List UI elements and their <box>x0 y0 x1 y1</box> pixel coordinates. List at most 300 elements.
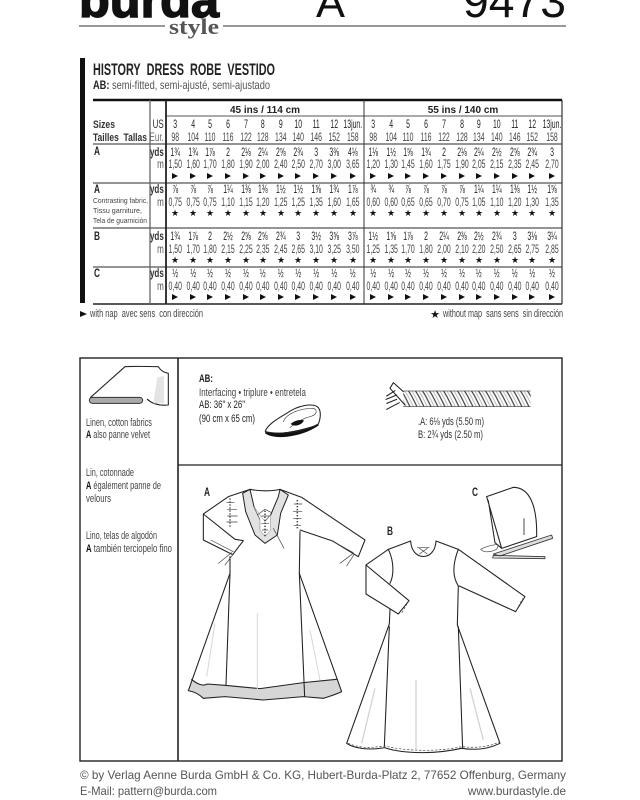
table values: 122 <box>240 131 252 145</box>
table values: 2,65 <box>291 243 305 257</box>
table values: 0,65 <box>419 196 433 210</box>
unit labels: yds <box>150 147 164 159</box>
table values: 134 <box>275 131 287 145</box>
table values: 0,40 <box>545 280 559 294</box>
table values: 13jun. <box>343 118 362 132</box>
table values: 116 <box>421 131 431 145</box>
table values: 8 <box>460 118 464 132</box>
stars: row A contrasting: ★ <box>206 209 214 219</box>
table values: ½ <box>225 267 231 281</box>
stars: row B: ★ <box>206 256 214 266</box>
stars: row B: ★ <box>277 256 285 266</box>
icon: twisted cord <box>386 383 531 409</box>
table values: 2,65 <box>508 243 522 257</box>
table values: 98 <box>369 131 377 145</box>
row labels <box>93 119 148 280</box>
table values: 1⅜ <box>241 183 251 197</box>
table values: 0,40 <box>455 280 469 294</box>
table values: 4⅛ <box>348 146 358 160</box>
table values: ½ <box>190 267 196 281</box>
table values: 11 <box>511 118 518 132</box>
table values: 0,40 <box>490 280 504 294</box>
table values: 1⅞ <box>348 183 358 197</box>
table values: 2,00 <box>256 158 270 172</box>
table values: 1,65 <box>346 196 360 210</box>
table values: 110 <box>403 131 413 145</box>
table values: 0,40 <box>419 280 433 294</box>
table values: 0,40 <box>221 280 235 294</box>
table values: 1⅛ <box>368 146 378 160</box>
table values: 158 <box>347 131 359 145</box>
table values: 3 <box>173 118 177 132</box>
table values: 3,65 <box>346 158 360 172</box>
unit labels: m <box>157 244 164 256</box>
nap arrows: row C <box>172 294 555 300</box>
text: interfacing requirements <box>199 373 307 425</box>
table values: 3 <box>296 230 300 244</box>
table values: ½ <box>459 267 465 281</box>
stars: row B: ★ <box>171 256 179 266</box>
table values: 0,40 <box>384 280 398 294</box>
table values: ⅞ <box>207 183 213 197</box>
table values <box>168 118 561 294</box>
table values: 2⅜ <box>457 230 467 244</box>
table values: 2,85 <box>545 243 559 257</box>
table values: 1,25 <box>274 196 288 210</box>
table values: 3⅜ <box>329 146 339 160</box>
stars: row A contrasting: ★ <box>277 209 285 219</box>
table values: 2¼ <box>439 230 449 244</box>
table values: 0,40 <box>472 280 486 294</box>
table values: ⅞ <box>423 183 429 197</box>
stars: row B: ★ <box>422 256 430 266</box>
table values: 2⅛ <box>241 146 251 160</box>
nap arrows: row A <box>172 173 555 179</box>
stars: row A contrasting: ★ <box>349 209 357 219</box>
table values: ⅞ <box>405 183 411 197</box>
icon: folded fabric <box>89 366 168 405</box>
text: fabric suggestions Spanish: A también terciopelo fino <box>86 543 172 555</box>
title: HISTORY DRESS ROBE VESTIDO <box>93 61 275 79</box>
table values: 2,35 <box>256 243 270 257</box>
table values: ⅞ <box>172 183 178 197</box>
text: fabric suggestions English: Linen, cotton fabrics <box>86 417 152 429</box>
table values: 2⅝ <box>258 230 268 244</box>
table values: ½ <box>243 267 249 281</box>
table values: 1,05 <box>472 196 486 210</box>
unit labels: Eur. <box>150 132 164 144</box>
table values: ¾ <box>370 183 376 197</box>
table values: 3¼ <box>547 230 557 244</box>
table values: 2,15 <box>221 243 235 257</box>
table values: 2,45 <box>274 243 288 257</box>
table values: 2⅝ <box>241 230 251 244</box>
row labels: A <box>94 144 100 158</box>
table values: 1,80 <box>221 158 235 172</box>
table values: 10 <box>493 118 501 132</box>
table values: 1,35 <box>384 243 398 257</box>
text: interfacing requirements: (90 cm x 65 cm) <box>199 413 255 425</box>
table values: 1½ <box>527 183 537 197</box>
table values: 134 <box>473 131 485 145</box>
table values: 1,25 <box>366 243 380 257</box>
table values: 1,30 <box>525 196 539 210</box>
text: interfacing requirements: Interfacing • triplure • entretela <box>199 387 307 399</box>
table values: 1,90 <box>239 158 253 172</box>
table values: 0,40 <box>186 280 200 294</box>
table values: 0,40 <box>508 280 522 294</box>
table values: 1¼ <box>492 183 502 197</box>
table values: 2⅝ <box>510 146 520 160</box>
table values: 4 <box>191 118 195 132</box>
table values: 2½ <box>223 230 233 244</box>
table values: 158 <box>546 131 558 145</box>
stars: row A contrasting: ★ <box>171 209 179 219</box>
text: fabric suggestions French: Lin, cotonnade <box>86 467 134 479</box>
table values: 128 <box>257 131 269 145</box>
notions panel frame <box>80 358 562 761</box>
table values: 2,50 <box>490 243 504 257</box>
table values: 2 <box>208 230 212 244</box>
table values: 146 <box>310 131 322 145</box>
table values: ⅞ <box>441 183 447 197</box>
unit labels: m <box>157 159 164 171</box>
table values: 0,65 <box>401 196 415 210</box>
table values: ½ <box>331 267 337 281</box>
table values: 3,25 <box>327 243 341 257</box>
text: cord quantities: B: 2¾ yds (2.50 m) <box>418 429 483 441</box>
table values: 0,40 <box>366 280 380 294</box>
table values: 1,60 <box>419 158 433 172</box>
table values: 0,60 <box>366 196 380 210</box>
legend: with nap <box>80 308 203 320</box>
table values: ½ <box>494 267 500 281</box>
text: fabric suggestions Spanish: Lino, telas de algodón <box>86 530 157 542</box>
table values: 2,70 <box>309 158 323 172</box>
table values: 3 <box>371 118 375 132</box>
table values: 2,00 <box>437 243 451 257</box>
table values: 2,05 <box>472 158 486 172</box>
table values: 8 <box>261 118 265 132</box>
stars: row A contrasting: ★ <box>369 209 377 219</box>
table values: 10 <box>294 118 302 132</box>
table values: ½ <box>350 267 356 281</box>
stars: row A contrasting: ★ <box>387 209 395 219</box>
table values: 1,10 <box>221 196 235 210</box>
stars: row A contrasting: ★ <box>475 209 483 219</box>
table values: 0,40 <box>291 280 305 294</box>
table values: 0,40 <box>239 280 253 294</box>
table values: ⅞ <box>190 183 196 197</box>
text: fabric suggestions English: A also panne velvet <box>86 429 150 441</box>
hem band <box>188 679 342 700</box>
table values: 1½ <box>293 183 303 197</box>
row labels: C <box>94 266 100 280</box>
table values: 1¾ <box>170 230 180 244</box>
table values: 1¼ <box>474 183 484 197</box>
table values: 0,75 <box>203 196 217 210</box>
table values: 11 <box>313 118 320 132</box>
stars: row A contrasting: ★ <box>189 209 197 219</box>
stars: row B: ★ <box>440 256 448 266</box>
table values: 2,50 <box>291 158 305 172</box>
table values: 1,35 <box>309 196 323 210</box>
stars: row A contrasting: ★ <box>458 209 466 219</box>
legend: without nap: ★ <box>430 308 440 321</box>
stars: row A contrasting: ★ <box>528 209 536 219</box>
table values: 1,25 <box>291 196 305 210</box>
table values: 2,75 <box>525 243 539 257</box>
width heading: 45 ins: 45 ins / 114 cm <box>230 105 300 116</box>
table values: ½ <box>278 267 284 281</box>
stars: row B: ★ <box>189 256 197 266</box>
table values: 1,50 <box>168 158 182 172</box>
legend: without nap <box>430 308 563 321</box>
table values: 1,75 <box>437 158 451 172</box>
table values: 1,15 <box>239 196 253 210</box>
label: view C: C <box>472 485 478 499</box>
text: fabric suggestions French: velours <box>86 493 111 505</box>
table values: 116 <box>223 131 233 145</box>
table values: 1,20 <box>256 196 270 210</box>
table values: 1⅝ <box>311 183 321 197</box>
stars: row A contrasting: ★ <box>330 209 338 219</box>
table values: 12 <box>528 118 536 132</box>
neck band <box>243 489 288 543</box>
legend: with nap: with nap avec sens con dirección <box>89 308 203 320</box>
unit labels: yds <box>150 231 164 243</box>
unit labels: m <box>157 197 164 209</box>
garment: dress A <box>188 489 365 700</box>
stars: row B: ★ <box>475 256 483 266</box>
icon: iron <box>265 405 320 436</box>
subtitle: AB: semi-fitted, semi-ajusté, semi-ajustado <box>93 78 270 92</box>
stars: row A contrasting: ★ <box>511 209 519 219</box>
dress outline <box>188 489 365 700</box>
table values: 2,35 <box>508 158 522 172</box>
text: fabric suggestions Spanish <box>86 530 172 555</box>
row labels: Tissu garniture, <box>93 206 142 215</box>
table values: 2¾ <box>276 230 286 244</box>
row labels: Tela de guarnición <box>93 216 147 225</box>
table values: ½ <box>172 267 178 281</box>
table values: 2,40 <box>274 158 288 172</box>
stars: row B: ★ <box>458 256 466 266</box>
table values: 1,20 <box>508 196 522 210</box>
table values: 1⅝ <box>386 230 396 244</box>
garment: dress B <box>347 541 525 753</box>
table values: 110 <box>205 131 215 145</box>
stars: row A contrasting: ★ <box>224 209 232 219</box>
table values: 2,15 <box>490 158 504 172</box>
stars: row A contrasting: ★ <box>493 209 501 219</box>
stars: row A contrasting: ★ <box>404 209 412 219</box>
table values: 0,75 <box>168 196 182 210</box>
table values: 1,60 <box>186 158 200 172</box>
table values: 3,50 <box>346 243 360 257</box>
table values: 1½ <box>276 183 286 197</box>
table values: 9 <box>279 118 283 132</box>
table values: 1,35 <box>545 196 559 210</box>
row labels: Contrasting fabric, <box>93 196 148 205</box>
table values: 0,40 <box>274 280 288 294</box>
table values: 2¾ <box>492 230 502 244</box>
stars: row B: ★ <box>528 256 536 266</box>
table values: ½ <box>423 267 429 281</box>
stars: row A contrasting: ★ <box>440 209 448 219</box>
table values: ½ <box>370 267 376 281</box>
table values: 3 <box>550 146 554 160</box>
table values: 1,70 <box>401 243 415 257</box>
table values: 2⅛ <box>457 146 467 160</box>
stars: row B: ★ <box>369 256 377 266</box>
table values: 152 <box>526 131 538 145</box>
table values: 3½ <box>311 230 321 244</box>
table values: 0,40 <box>525 280 539 294</box>
table values: 1¾ <box>329 183 339 197</box>
stars: row A contrasting: ★ <box>422 209 430 219</box>
table values: 1½ <box>368 230 378 244</box>
table values: 1,80 <box>203 243 217 257</box>
text: fabric suggestions French: A également panne de <box>86 480 161 492</box>
table values: 1,20 <box>366 158 380 172</box>
table values: 0,40 <box>346 280 360 294</box>
table values: 0,40 <box>437 280 451 294</box>
table values: ¾ <box>388 183 394 197</box>
footer: website: www.burdastyle.de <box>467 785 566 798</box>
table values: 3,10 <box>309 243 323 257</box>
table values: ⅞ <box>459 183 465 197</box>
table values: 98 <box>171 131 179 145</box>
table values: ½ <box>549 267 555 281</box>
stars: row A contrasting: ★ <box>259 209 267 219</box>
table values: 3 <box>513 230 517 244</box>
stars: row B: ★ <box>294 256 302 266</box>
table values: 0,40 <box>309 280 323 294</box>
table values: ½ <box>313 267 319 281</box>
table values: 1⅜ <box>258 183 268 197</box>
table values: 6 <box>424 118 428 132</box>
table values: 1,80 <box>419 243 433 257</box>
stars: row B: ★ <box>349 256 357 266</box>
stars: row B: ★ <box>242 256 250 266</box>
footer: email: E-Mail: pattern@burda.com <box>80 785 217 798</box>
width heading: 55 ins: 55 ins / 140 cm <box>428 105 498 116</box>
table values: 2¼ <box>258 146 268 160</box>
text: fabric suggestions French <box>86 467 161 505</box>
stars: row B: ★ <box>493 256 501 266</box>
table values: 5 <box>406 118 410 132</box>
table values: 7 <box>442 118 446 132</box>
table values: 0,75 <box>455 196 469 210</box>
unit labels: yds <box>150 268 164 280</box>
table values: 3⅝ <box>329 230 339 244</box>
lacing details <box>230 498 297 536</box>
table values: 1½ <box>386 146 396 160</box>
table values: ½ <box>512 267 518 281</box>
table values: 146 <box>509 131 521 145</box>
table values: 3 <box>314 146 318 160</box>
table values: 2½ <box>492 146 502 160</box>
table values: 0,40 <box>203 280 217 294</box>
table values: 2 <box>442 146 446 160</box>
table values: 152 <box>328 131 340 145</box>
stars: row B: ★ <box>387 256 395 266</box>
stars: row B: ★ <box>548 256 556 266</box>
unit labels: US <box>153 119 164 131</box>
table values: ½ <box>476 267 482 281</box>
label: view B: B <box>387 524 393 538</box>
table values: 2 <box>226 146 230 160</box>
table values: 122 <box>438 131 450 145</box>
table values: 104 <box>187 131 199 145</box>
black side bar <box>80 58 85 303</box>
text: cord quantities <box>418 416 484 441</box>
text: cord quantities: .A: 6⅛ yds (5.50 m) <box>418 416 484 428</box>
table values: ½ <box>441 267 447 281</box>
row labels: B <box>94 229 100 243</box>
table values: 140 <box>491 131 503 145</box>
row labels: Tailles Tallas <box>93 132 147 144</box>
table values: 2,70 <box>545 158 559 172</box>
unit labels <box>150 119 164 293</box>
stars: row A contrasting: ★ <box>548 209 556 219</box>
table values: 5 <box>208 118 212 132</box>
stars: row B: ★ <box>330 256 338 266</box>
table values: 2¾ <box>527 146 537 160</box>
table values: 104 <box>385 131 397 145</box>
row labels: Sizes <box>93 119 115 131</box>
table values: 2,10 <box>455 243 469 257</box>
table values: 2¾ <box>293 146 303 160</box>
table values: 1⅞ <box>403 230 413 244</box>
table values: 2 <box>424 230 428 244</box>
footer: copyright and address: © by Verlag Aenne Burda GmbH & Co. KG, Hubert-Burda-Platz 2, 77652 Offenburg, Germany <box>80 769 566 782</box>
table values: 1⅞ <box>205 146 215 160</box>
table values: 0,40 <box>327 280 341 294</box>
table values: 128 <box>456 131 468 145</box>
table values: 3,00 <box>327 158 341 172</box>
table values: 1⅜ <box>510 183 520 197</box>
text: fabric suggestions English <box>86 417 152 441</box>
row labels: A <box>94 182 100 196</box>
legend: without nap: without map sans sens sin dirección <box>442 308 563 320</box>
table values: 1¼ <box>223 183 233 197</box>
table values: 1⅝ <box>403 146 413 160</box>
table values: ½ <box>529 267 535 281</box>
stars: row A contrasting: ★ <box>294 209 302 219</box>
table values: 7 <box>244 118 248 132</box>
table values: 1¾ <box>421 146 431 160</box>
header: burda style logo: style <box>169 14 219 39</box>
table values: 0,75 <box>186 196 200 210</box>
table values: 2⅝ <box>276 146 286 160</box>
table values: 1¾ <box>170 146 180 160</box>
table values: 1,90 <box>455 158 469 172</box>
table values: 2¼ <box>474 146 484 160</box>
table values: 0,60 <box>384 196 398 210</box>
table values: 1⅝ <box>547 183 557 197</box>
table values: 1,70 <box>203 158 217 172</box>
table values: ½ <box>295 267 301 281</box>
table values: ½ <box>405 267 411 281</box>
table values: 1⅞ <box>188 230 198 244</box>
table values: 1,30 <box>384 158 398 172</box>
table values: 0,40 <box>401 280 415 294</box>
table values: ½ <box>388 267 394 281</box>
label: view A: A <box>204 485 210 499</box>
stars: row A contrasting: ★ <box>242 209 250 219</box>
